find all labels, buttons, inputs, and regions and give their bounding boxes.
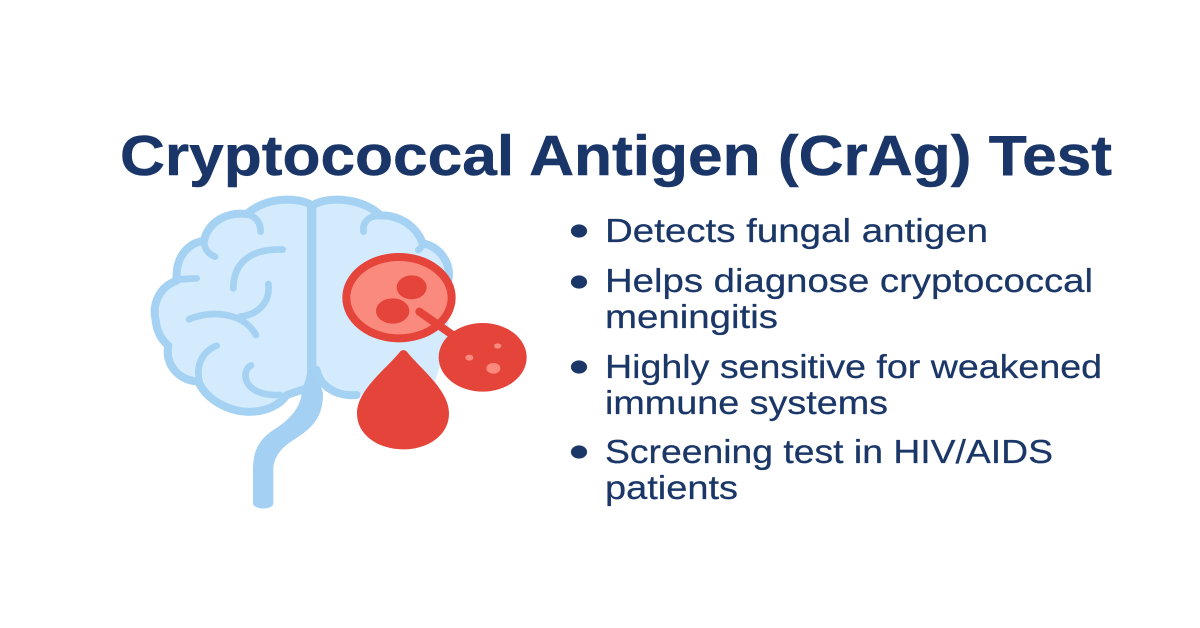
bullet: helps diagnose bbox=[571, 262, 1093, 335]
bullet: highly sensitive bbox=[571, 348, 1102, 421]
right hemisphere bbox=[312, 200, 449, 395]
bullet: highly sensitive: immune systems bbox=[605, 384, 888, 421]
icon: blood drop bbox=[357, 350, 449, 449]
bullet: screening test: Screening test in HIV/AIDS bbox=[605, 433, 1053, 470]
bullet: screening test bbox=[571, 433, 1053, 506]
bullet: detects fungal antigen: Detects fungal antigen bbox=[605, 212, 988, 249]
bullet list bbox=[571, 212, 1102, 506]
brain stem bbox=[253, 370, 323, 508]
bullet: helps diagnose: meningitis bbox=[605, 298, 778, 335]
title: Cryptococcal Antigen (CrAg) Test bbox=[120, 124, 1112, 188]
bullet: highly sensitive: Highly sensitive for weakened bbox=[605, 348, 1102, 385]
bullet: helps diagnose: Helps diagnose cryptococcal bbox=[605, 262, 1093, 299]
brain folds bbox=[177, 214, 423, 395]
central fissure bbox=[298, 205, 326, 383]
icon: brain bbox=[155, 200, 449, 508]
left hemisphere bbox=[155, 200, 312, 412]
icon: red cell with spores bbox=[439, 323, 527, 392]
right hemisphere outline bbox=[313, 200, 449, 395]
illustration: brain with infection and blood drop bbox=[155, 200, 527, 508]
bullet: screening test: patients bbox=[605, 469, 738, 506]
icon: magnified fungal cells bbox=[346, 257, 455, 338]
